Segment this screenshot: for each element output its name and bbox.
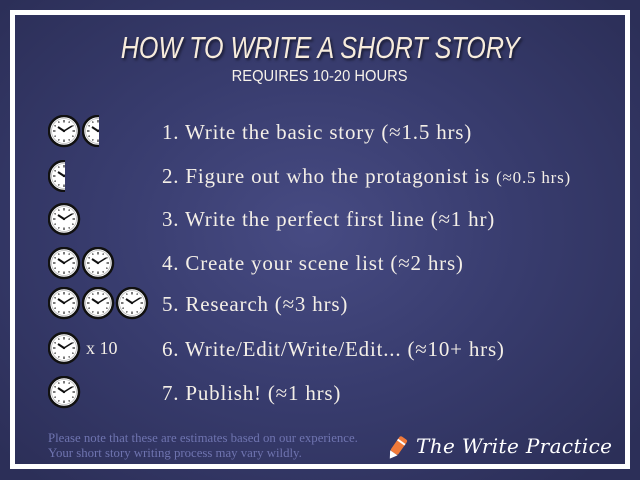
icon: clock 1 bbox=[48, 376, 80, 408]
title: HOW TO WRITE A SHORT STORY bbox=[120, 30, 520, 65]
icon: clocks 1.5 bbox=[48, 115, 99, 148]
step 3: 3. Write the perfect first line (≈1 hr) bbox=[162, 207, 495, 231]
step 7: 7. Publish! (≈1 hrs) bbox=[162, 381, 341, 405]
logo: The Write Practice bbox=[416, 434, 612, 458]
footnote: Your short story writing process may vary wildly. bbox=[48, 446, 302, 460]
footnote: Please note that these are estimates based on our experience. bbox=[48, 431, 358, 445]
step 4: 4. Create your scene list (≈2 hrs) bbox=[162, 251, 464, 275]
icon: clocks 3 bbox=[48, 287, 148, 320]
step 6: 6. Write/Edit/Write/Edit... (≈10+ hrs) bbox=[162, 337, 505, 361]
icon: clock half bbox=[48, 160, 65, 192]
step 2: 2. Figure out who the protagonist is (≈0.5 hrs) bbox=[162, 164, 571, 188]
icon: clocks 2 bbox=[48, 247, 114, 280]
subtitle: REQUIRES 10-20 HOURS bbox=[232, 68, 408, 85]
icon: clock x10 bbox=[48, 332, 80, 364]
footnote bbox=[48, 431, 358, 460]
label x10: x 10 bbox=[86, 338, 118, 358]
icon: clock 1 bbox=[48, 203, 80, 236]
step 1: 1. Write the basic story (≈1.5 hrs) bbox=[162, 120, 472, 144]
step 5: 5. Research (≈3 hrs) bbox=[162, 292, 348, 316]
